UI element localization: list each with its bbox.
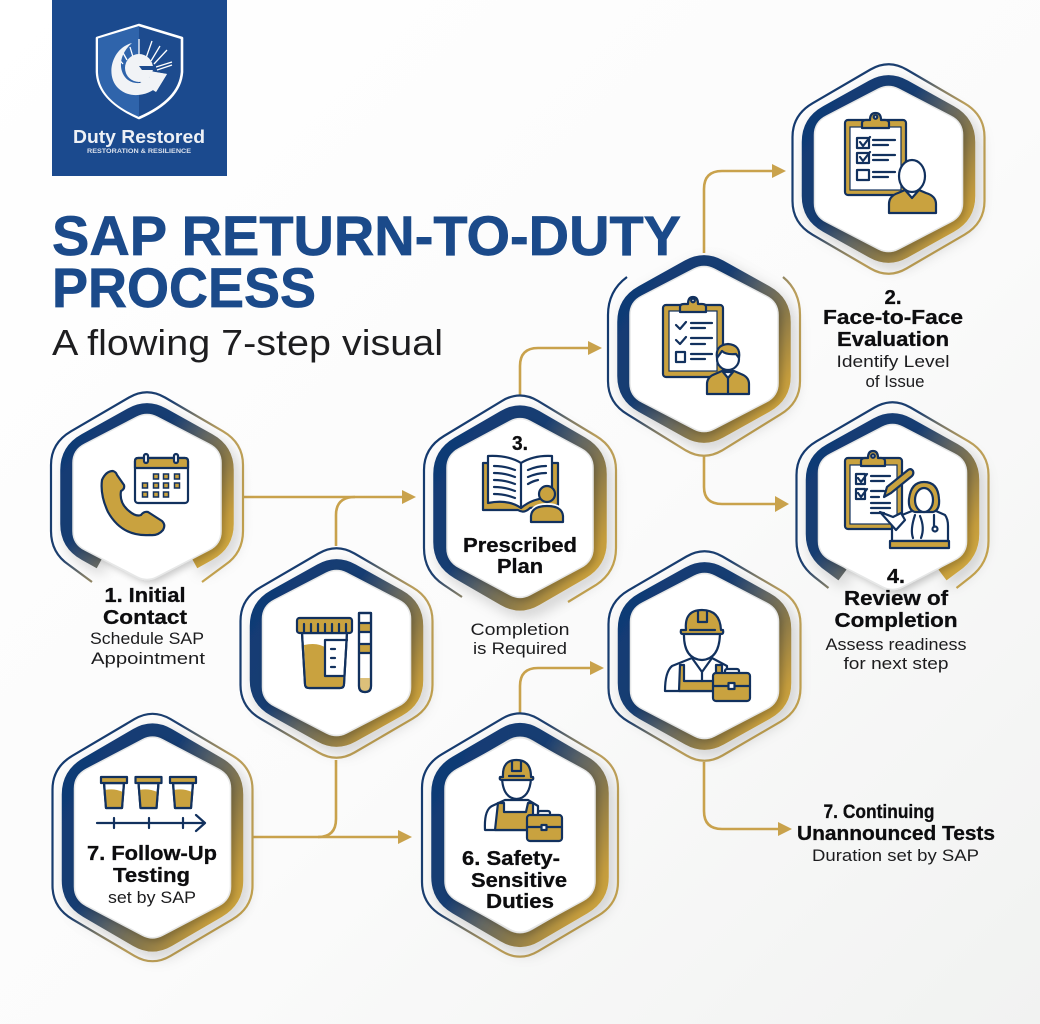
heading: Initial Contact: Contact <box>103 606 187 629</box>
arrow: Follow-Up Testing and test cup to Safety-Sensitive Duties <box>252 760 412 844</box>
heading number: 3: 3. <box>512 432 528 455</box>
arrow: clipboard step to Face-to-Face Evaluation <box>704 164 786 253</box>
text block: Continuing Unannounced Tests: 7. Continuing <box>824 802 934 823</box>
icon: specimen cup and test tube <box>297 613 371 692</box>
logo tagline: RESTORATION & RESILIENCE <box>87 148 192 155</box>
arrow: clipboard step to Review of Completion <box>704 456 789 512</box>
heading: Prescribed Plan: Plan <box>497 555 543 578</box>
heading: Follow-Up Testing: 7. Follow-Up <box>87 842 217 865</box>
heading: Face-to-Face Evaluation: Face-to-Face <box>823 306 963 329</box>
heading: Face-to-Face Evaluation: 2. <box>884 286 902 309</box>
text block: Continuing Unannounced Tests: Unannounced Tests <box>797 822 995 845</box>
icon: clipboard and person <box>845 113 936 213</box>
text: Assess readiness for next step <box>826 636 966 673</box>
title: PROCESS <box>52 256 316 319</box>
text: Identify Level of Issue: Identify Level <box>836 353 950 371</box>
heading: Prescribed Plan <box>463 534 577 578</box>
arrow: Prescribed Plan to clipboard step <box>520 341 602 395</box>
title <box>52 204 681 319</box>
heading: Review of Completion <box>834 565 958 632</box>
text: set by SAP: set by SAP <box>108 889 196 907</box>
heading: Follow-Up Testing: Testing <box>113 864 190 887</box>
icon: worker with briefcase <box>665 610 750 701</box>
heading: Safety-Sensitive Duties: Duties <box>486 890 554 913</box>
text: Schedule SAP Appointment: Schedule SAP <box>90 630 204 648</box>
icon: open book and person <box>483 456 564 523</box>
icon: phone and calendar <box>102 454 188 535</box>
logo wordmark: Duty Restored <box>73 127 205 147</box>
icon: clipboard, pencil and doctor <box>845 451 949 548</box>
panel: step 3 Prescribed Plan <box>424 395 616 658</box>
panel: step 7 Follow-Up Testing <box>52 714 252 961</box>
icon: three cups on timeline <box>97 777 205 831</box>
panel: clipboard step <box>608 262 800 456</box>
text: Assess readiness for next step: for next step <box>844 655 948 673</box>
text: Completion is Required: is Required <box>473 640 567 658</box>
heading: Safety-Sensitive Duties <box>462 847 567 913</box>
arrow: Initial Contact to Prescribed Plan <box>243 490 416 546</box>
icon: worker with briefcase <box>485 760 562 841</box>
text block: Continuing Unannounced Tests: Duration set by SAP <box>812 847 979 865</box>
text: Identify Level of Issue: of Issue <box>866 373 924 391</box>
heading: Review of Completion: 4. <box>887 565 905 588</box>
heading: Face-to-Face Evaluation <box>823 286 963 351</box>
heading: Initial Contact: 1. Initial <box>104 584 186 607</box>
logo: Duty Restored <box>52 0 227 176</box>
heading: Follow-Up Testing <box>87 842 217 887</box>
text: Completion is Required: Completion <box>470 621 570 639</box>
heading: Prescribed Plan: Prescribed <box>463 534 577 557</box>
text: Identify Level of Issue <box>836 353 950 391</box>
heading: Review of Completion: Completion <box>834 609 958 632</box>
heading: Safety-Sensitive Duties: 6. Safety- <box>462 847 560 870</box>
title: SAP RETURN-TO-DUTY <box>52 204 681 267</box>
icon: shield <box>97 25 182 118</box>
panel: worker step <box>608 551 800 761</box>
heading: Safety-Sensitive Duties: Sensitive <box>471 869 567 892</box>
panel: step 6 Safety-Sensitive Duties <box>422 713 618 957</box>
panel: step 1 Initial Contact <box>51 392 243 668</box>
arrow: worker step to Continuing Unannounced Tests <box>704 762 792 836</box>
icon: clipboard and professional <box>663 297 749 394</box>
heading: Review of Completion: Review of <box>844 587 948 610</box>
subtitle: A flowing 7-step visual <box>52 322 443 363</box>
panel: step 4 Review of Completion <box>796 402 988 673</box>
text: Schedule SAP Appointment <box>90 630 205 668</box>
panel: step 2 Face-to-Face Evaluation <box>792 64 984 391</box>
text: Assess readiness for next step: Assess readiness <box>826 636 966 654</box>
text: Schedule SAP Appointment: Appointment <box>91 650 205 668</box>
panel: test cup step <box>240 548 432 758</box>
heading: Initial Contact <box>103 584 187 629</box>
text: Completion is Required <box>470 621 570 658</box>
arrow: Safety-Sensitive Duties to worker step <box>520 661 604 713</box>
heading: Face-to-Face Evaluation: Evaluation <box>837 328 949 351</box>
text block: Continuing Unannounced Tests <box>797 802 995 865</box>
